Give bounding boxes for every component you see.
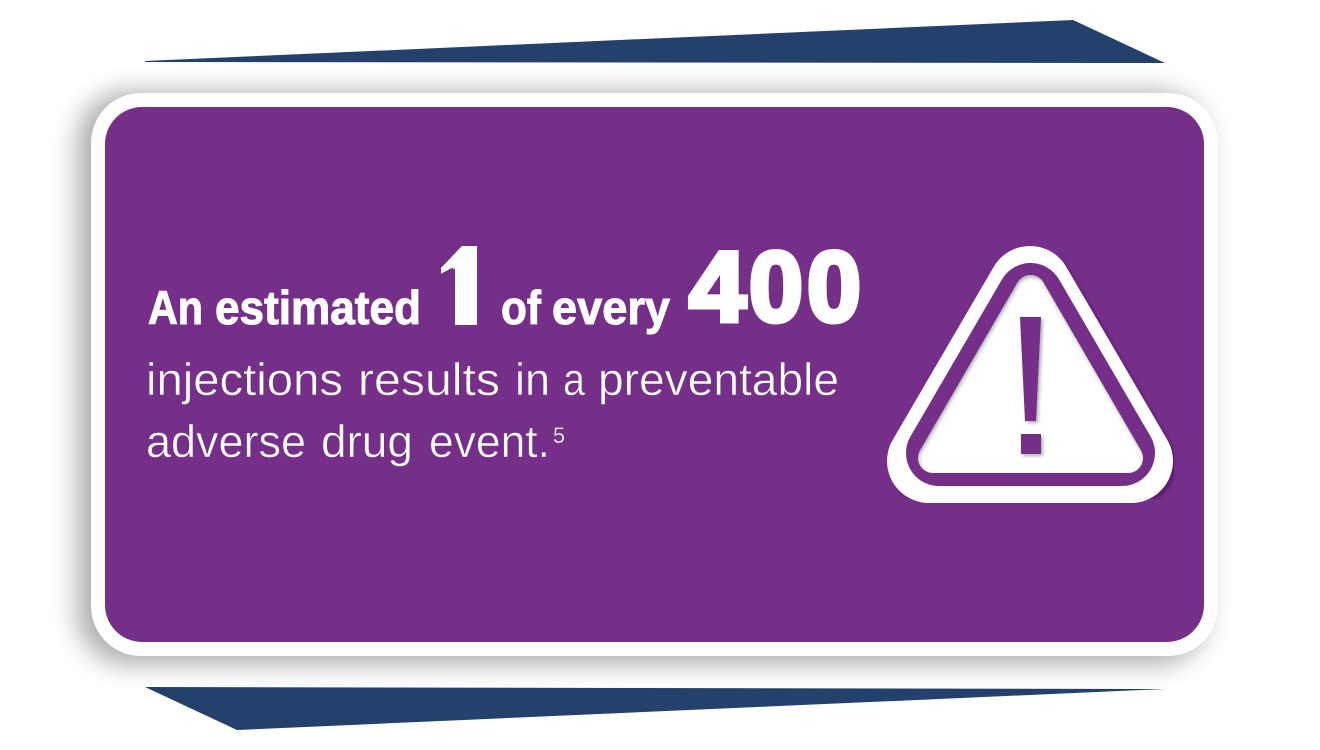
supporting text: adverse	[146, 416, 306, 467]
supporting text: event.	[429, 416, 550, 467]
supporting text: injections	[146, 354, 343, 405]
icon: warning triangle	[929, 288, 1134, 464]
headline statistic	[148, 246, 860, 334]
headline statistic: 4	[689, 231, 746, 342]
supporting text: in	[515, 354, 550, 405]
headline statistic: An	[148, 281, 203, 334]
headline statistic: 1	[427, 226, 497, 349]
bottom ribbon	[145, 687, 1165, 730]
supporting text: results	[358, 354, 500, 405]
headline statistic: of	[501, 281, 541, 334]
supporting text: 5	[553, 423, 565, 448]
panel: purple callout card	[78, 92, 1218, 664]
headline statistic: 0	[807, 231, 861, 342]
icon: exclamation mark	[1020, 317, 1043, 456]
headline statistic: 0	[749, 231, 803, 342]
headline statistic: estimated	[215, 281, 421, 334]
headline statistic: every	[552, 281, 670, 334]
supporting text: a	[563, 354, 586, 405]
supporting text: drug	[321, 416, 413, 467]
top ribbon	[145, 20, 1165, 63]
supporting text: preventable	[598, 354, 839, 405]
supporting text	[146, 354, 839, 467]
